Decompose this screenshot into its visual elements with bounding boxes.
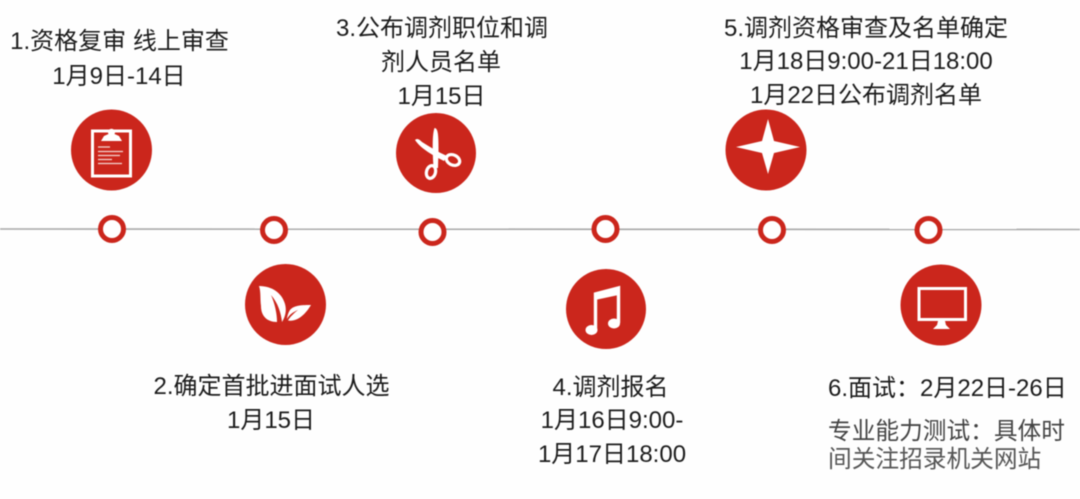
step 2 text: 1月15日 (227, 407, 315, 434)
step 3 text (336, 15, 548, 110)
step 1 text: 1.资格复审 线上审查 (10, 28, 229, 55)
icon: scissors (396, 113, 476, 193)
icon: clipboard (71, 110, 152, 190)
step 1 text (10, 28, 229, 90)
step 5 text: 1月18日9:00-21日18:00 (739, 48, 993, 75)
step 4 text: 1月16日9:00- (541, 407, 683, 434)
step 3 text: 3.公布调剂职位和调 (336, 15, 548, 42)
step 6 text (828, 375, 1067, 473)
step 2 text: 2.确定首批进面试人选 (153, 373, 390, 400)
icon: music note (566, 269, 646, 349)
icon: monitor (900, 264, 982, 346)
step 2 text (153, 373, 390, 434)
timeline nodes (100, 218, 940, 244)
step 5 text: 1月22日公布调剂名单 (750, 82, 982, 109)
step 6 text: 6.面试：2月22日-26日 (828, 375, 1067, 402)
step 5 text (724, 15, 1008, 109)
step 1 text: 1月9日-14日 (52, 63, 186, 90)
step 4 text: 4.调剂报名 (552, 374, 669, 401)
step 3 text: 1月15日 (397, 83, 486, 110)
step 4 text (538, 374, 686, 468)
step 5 text: 5.调剂资格审查及名单确定 (724, 15, 1008, 42)
icon: leaves (245, 264, 326, 345)
step 6 text: 间关注招录机关网站 (828, 446, 1041, 473)
step 3 text: 剂人员名单 (381, 49, 501, 76)
timeline axis (0, 228, 1080, 230)
icon: four-point star (726, 110, 806, 190)
step 4 text: 1月17日18:00 (538, 441, 686, 468)
step 6 text: 专业能力测试：具体时 (828, 418, 1065, 445)
